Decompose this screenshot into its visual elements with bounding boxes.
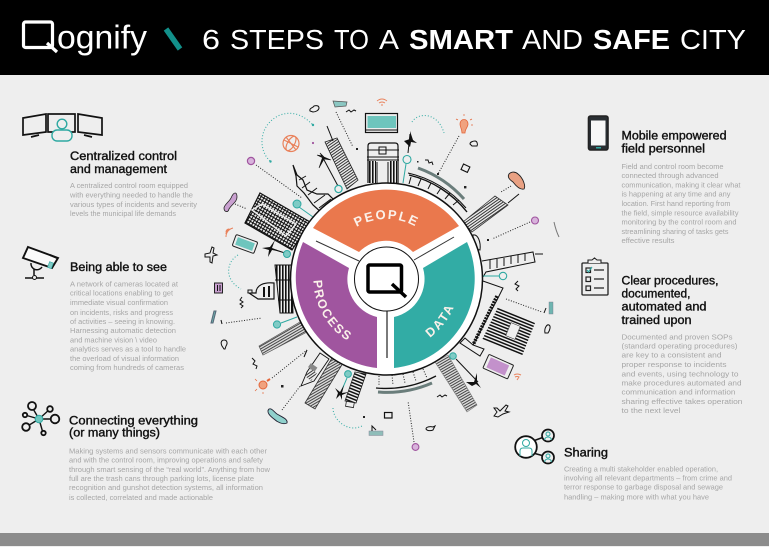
building: classical hall <box>367 143 399 183</box>
icon: boat <box>369 426 383 436</box>
text block: terror response to garbage disposal and sewage <box>564 482 723 491</box>
arc: dotted teal bottom <box>333 408 362 428</box>
text block: analytics serves as a tool to handle <box>70 345 186 354</box>
text block: sharing effective takes operation <box>622 397 742 406</box>
building: church tower <box>293 165 337 214</box>
icon: orange bulb with dotted line <box>255 350 307 394</box>
icon: wifi top <box>377 99 387 105</box>
heading: and management <box>70 164 168 176</box>
wheel base <box>290 183 482 375</box>
text block: communication and information <box>622 388 736 397</box>
text block: and events, using technology to <box>622 369 738 378</box>
text block: and with the control room, improving operations and safety <box>69 455 263 464</box>
building: hatched block right top <box>463 194 519 232</box>
building: hatched diagonal left <box>259 322 307 355</box>
text block: is happening at any time and any <box>622 190 731 199</box>
text block: proper response to incidents <box>622 360 727 369</box>
icon: small cloud right <box>470 141 477 146</box>
building: tall hatched tower <box>305 358 343 409</box>
building: bottom arc bridge <box>376 369 436 392</box>
text block: connected through advanced <box>622 171 718 180</box>
text block: critical locations enabling to get <box>70 289 174 298</box>
icon: drone with dotted line <box>333 101 358 150</box>
segment: data: DATA <box>425 306 454 338</box>
icon: windmill and pin <box>403 131 417 183</box>
text block: involving all relevant departments – from crime and <box>564 474 732 483</box>
icon: monitors and operator <box>23 114 102 141</box>
text block: recognition and gunshot detection systems, all information <box>69 483 263 492</box>
icon: teal pin right <box>482 272 507 280</box>
squiggle <box>240 297 243 308</box>
icon: monitor top <box>366 114 398 132</box>
text block: and machine vision \ video <box>70 336 157 345</box>
icon: tree right <box>545 325 550 333</box>
icon: small cloud bottom <box>426 426 435 431</box>
heading: Clear procedures, <box>622 275 718 287</box>
icon: pin and airplane right <box>450 353 481 388</box>
text block: Documented and proven SOPs <box>622 332 733 341</box>
icon: clipboard checklist <box>582 258 608 295</box>
text block: immediate visual confirmation <box>70 298 168 307</box>
logo: Qognify: ognify <box>57 18 148 56</box>
heading: (or many things) <box>69 428 160 440</box>
heading: Connecting everything <box>69 416 198 428</box>
squiggle <box>252 358 257 369</box>
building: capitol dome <box>248 283 274 299</box>
panel: centralized control <box>23 114 197 218</box>
text block: with everything needed to handle the <box>69 190 193 200</box>
segment: people: PEOPLE <box>353 210 418 226</box>
text block: communication, making it clear what <box>622 180 741 189</box>
text block: various types of incidents and severity <box>70 200 197 209</box>
icon: connected people <box>515 430 554 464</box>
heading <box>70 151 177 176</box>
panel: being able to see <box>23 247 186 372</box>
text block <box>70 280 186 372</box>
icon: wind turbine top left <box>317 153 342 193</box>
building: top right bridge arc <box>408 168 467 212</box>
panel: sharing <box>515 430 732 501</box>
heading <box>69 416 198 440</box>
text block: handling – making more with what you have <box>564 492 709 501</box>
text block: Creating a multi stakeholder enabled operation, <box>564 465 718 474</box>
heading <box>622 275 718 327</box>
building: hatched skyscraper top left <box>325 126 358 189</box>
panel: connecting everything <box>22 402 270 502</box>
title: SAFE <box>593 24 670 55</box>
building: large diagonal block <box>245 193 310 250</box>
spokes <box>316 237 454 358</box>
text block: to the next level <box>622 406 681 415</box>
icon: pin with line <box>293 200 313 217</box>
text block <box>622 332 742 415</box>
text block: effective results <box>622 236 675 245</box>
icon: salmon cloud <box>501 172 525 192</box>
text block: Making systems and sensors communicate with each other <box>69 446 267 455</box>
squiggle <box>437 395 447 397</box>
text block: of activities – seeing in knowing. <box>70 317 175 326</box>
header bar <box>0 0 769 75</box>
icon: pin and airplane bottom <box>335 371 351 400</box>
icon: purple box <box>214 283 222 293</box>
building: long hatched bottom right <box>435 355 477 412</box>
heading: documented, <box>622 289 690 301</box>
title: CITY <box>680 24 746 55</box>
text block <box>622 162 741 245</box>
text block <box>69 181 197 218</box>
panel: mobile empowered <box>588 116 741 245</box>
text block: streamlining sharing of tasks gets <box>622 227 729 236</box>
title: STEPS <box>230 24 324 55</box>
icon: teal slash <box>166 29 180 49</box>
segment: process <box>296 242 377 368</box>
text block: Harnessing automatic detection <box>70 326 176 335</box>
squiggle <box>425 160 433 165</box>
icon: teal cloud with dotted line <box>268 385 301 424</box>
heading: trained upon <box>622 315 692 327</box>
building: ruler tower <box>482 252 543 277</box>
text block <box>69 446 270 502</box>
text block: the overload of visual information <box>70 354 179 363</box>
footer band <box>0 533 769 546</box>
building: left colonnade <box>275 265 293 313</box>
wheel diagram <box>290 182 484 376</box>
text block <box>564 465 732 501</box>
icon: purple pin right with dotted line <box>487 217 538 241</box>
building: pencil tower <box>301 353 329 386</box>
text block: Field and control room become <box>622 162 724 171</box>
city illustration around the wheel <box>205 99 559 450</box>
icon: security camera <box>23 247 58 280</box>
building: thin tower bottom <box>345 372 366 408</box>
heading <box>622 130 726 156</box>
hub <box>354 247 418 311</box>
squiggle <box>515 281 519 291</box>
icon: network nodes <box>22 402 59 435</box>
icon: orange wifi left <box>226 228 233 237</box>
text block: monitoring by the control room and <box>622 218 736 227</box>
title <box>202 24 746 55</box>
icon: plane outline left <box>205 247 217 263</box>
icon: black airplane and pin <box>262 240 290 258</box>
icon: purple pin bottom <box>408 401 419 450</box>
icon: orange wifi right <box>514 374 521 380</box>
arc: dotted teal left <box>229 255 241 289</box>
title: SMART <box>409 24 513 55</box>
heading: Sharing <box>564 448 608 460</box>
text block: is collected, correlated and made actionable <box>69 493 213 502</box>
text block: A centralized control room equipped <box>70 181 188 190</box>
icon: teal pin left <box>273 317 297 328</box>
text block: levels the municipal life demands <box>70 209 176 218</box>
text block: coming from hundreds of cameras <box>70 363 184 372</box>
icon: bulb orange top right <box>437 114 473 175</box>
icon: Q logo <box>368 265 406 297</box>
text block: location. First hand reporting from <box>622 199 730 208</box>
segment: data <box>394 242 475 368</box>
heading: Mobile empowered <box>622 130 726 142</box>
icon: cloud outline <box>310 106 319 112</box>
title: 6 <box>202 24 220 55</box>
icon: orange globe <box>283 135 299 152</box>
heading: Being able to see <box>70 262 167 274</box>
segment: people <box>313 190 459 252</box>
text block: on incidents, risks and progress <box>70 308 173 317</box>
arc: dotted teal top left <box>262 113 313 161</box>
title: TO <box>334 24 369 55</box>
icon: purple phone <box>483 354 514 379</box>
icon: small box bottom <box>384 412 392 418</box>
squiggle <box>346 110 356 112</box>
text block: through smart sensing of the “real world”. Anything from how <box>69 465 270 474</box>
text block: full are the trash cans through parking lots, license plate <box>69 474 254 483</box>
icon: gauge with dotted line <box>211 311 262 324</box>
icon: small bus <box>473 235 480 250</box>
icon: tree <box>221 340 227 349</box>
text block: make procedures automated and <box>622 378 742 387</box>
heading: field personnel <box>622 144 705 156</box>
icon: phone left <box>232 234 258 254</box>
icon: purple cloud <box>224 193 247 212</box>
icon: small box <box>461 164 470 172</box>
text block: A network of cameras located at <box>70 280 179 289</box>
icon: mobile phone <box>588 116 608 150</box>
panel: clear procedures <box>582 258 742 415</box>
title: A <box>379 24 399 55</box>
arc: dotted teal top right <box>412 116 444 133</box>
icon: gauge right <box>506 299 553 314</box>
text block: are key to a consistent and <box>622 351 722 360</box>
building: dam <box>460 280 535 356</box>
text block: the field, simple resource availability <box>622 208 739 217</box>
text block: (standard operating procedures) <box>622 341 738 350</box>
heading: Centralized control <box>70 151 177 163</box>
icon: purple pin with dotted line <box>247 157 302 198</box>
title: AND <box>522 24 583 55</box>
segment: process: PROCESS <box>313 280 351 340</box>
icon: plane outline right <box>494 405 509 417</box>
heading: automated and <box>622 302 706 314</box>
